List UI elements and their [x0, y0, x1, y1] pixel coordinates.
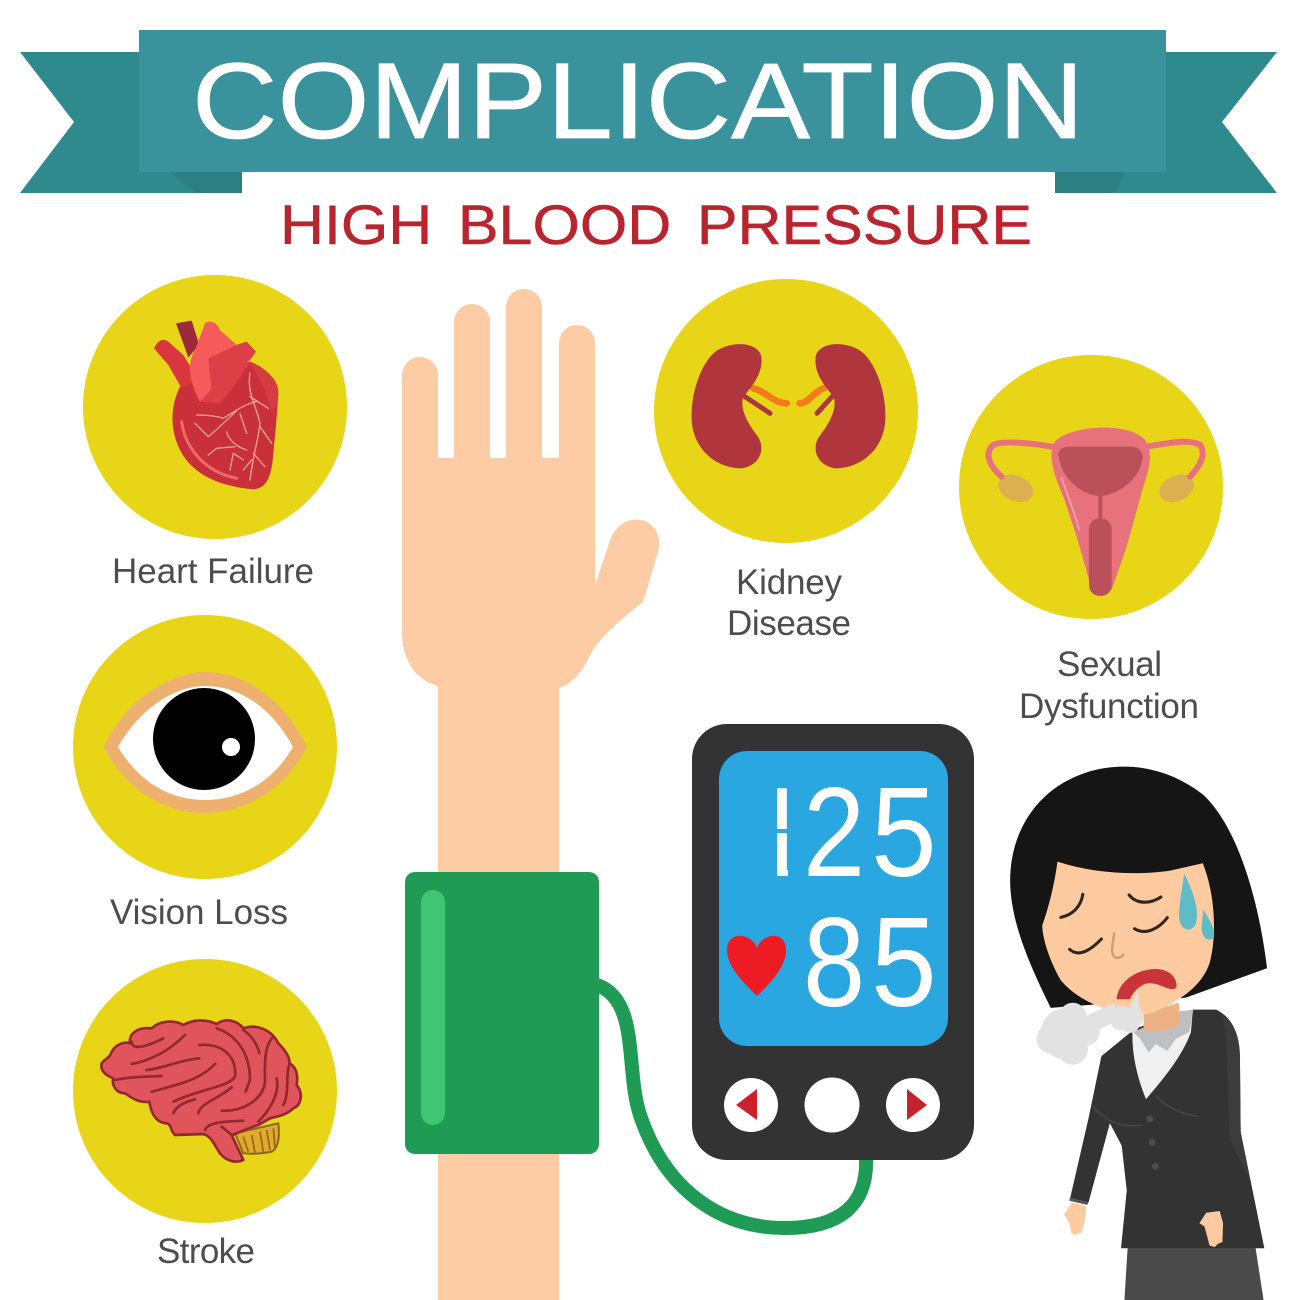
panel: vision loss	[73, 615, 337, 879]
label: stroke: Stroke	[157, 1232, 255, 1271]
woman character	[1010, 767, 1267, 1300]
label: kidney disease	[727, 563, 851, 643]
icon: kidneys	[692, 344, 885, 468]
arm and hand	[402, 289, 659, 1300]
panel: stroke	[73, 959, 337, 1223]
eyes and brows	[1061, 894, 1167, 953]
panel: heart failure	[83, 275, 347, 539]
label: kidney disease: Disease	[727, 604, 851, 643]
mouth	[1117, 969, 1177, 999]
label: heart failure: Heart Failure	[112, 552, 314, 591]
panel: kidney disease	[654, 279, 918, 543]
monitor screen	[719, 751, 948, 1046]
air tube	[597, 985, 866, 1228]
icon: heart rate	[727, 936, 786, 996]
reading: diastolic: 8	[803, 892, 865, 1034]
reading: diastolic: 5	[871, 891, 937, 1033]
icon: heart	[154, 321, 278, 489]
icon: brain	[101, 1020, 301, 1162]
reading: systolic: 2	[803, 762, 865, 904]
icon: uterus	[988, 428, 1203, 596]
label: sexual dysfunction: Dysfunction	[1019, 687, 1199, 726]
label: vision loss: Vision Loss	[110, 893, 288, 932]
subtitle: HIGH BLOOD PRESSURE	[280, 193, 1032, 256]
reading: systolic: 5	[871, 761, 937, 903]
reading: systolic	[777, 787, 932, 877]
button: centre	[804, 1078, 860, 1132]
label: kidney disease: Kidney	[736, 563, 842, 602]
label: sexual dysfunction	[1019, 645, 1199, 726]
panel: sexual dysfunction	[959, 355, 1223, 619]
label: sexual dysfunction: Sexual	[1057, 645, 1162, 684]
button: next	[886, 1078, 940, 1132]
banner ribbon	[20, 30, 1277, 193]
sweat drops	[1179, 874, 1197, 930]
breath cloud	[1037, 991, 1144, 1065]
blood pressure monitor	[692, 724, 974, 1160]
icon: eye	[104, 672, 307, 813]
blood pressure cuff	[405, 872, 599, 1154]
hands	[1064, 1202, 1086, 1235]
reading: systolic: 1	[748, 761, 812, 909]
reading: diastolic	[803, 891, 937, 1034]
button: previous	[724, 1078, 778, 1132]
title: COMPLICATION	[192, 40, 1084, 161]
